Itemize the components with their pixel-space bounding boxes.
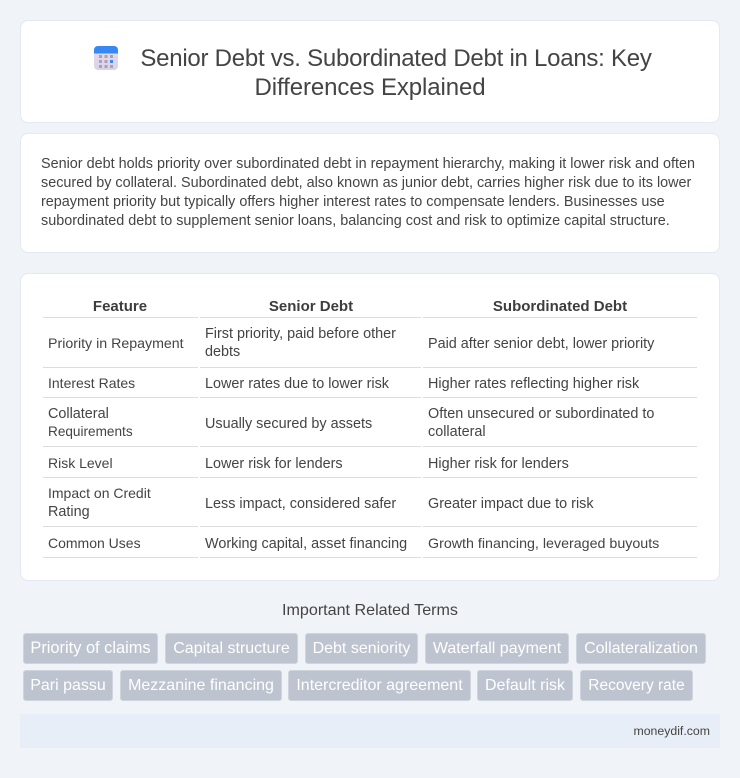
table row: risk level: Lower risk for lenders	[205, 456, 343, 472]
panel: introduction	[20, 133, 720, 253]
table row: interest rates	[48, 375, 640, 392]
footer bar	[20, 714, 720, 748]
footer text: moneydif.com	[633, 724, 710, 738]
icon: calendar	[94, 46, 118, 70]
tag	[576, 633, 706, 664]
panel: comparison table	[20, 273, 720, 581]
table row: common uses	[48, 535, 659, 552]
table row: impact on credit rating: Less impact, considered safer	[205, 496, 396, 512]
table row: common uses: Common Uses	[48, 535, 141, 551]
table row: priority in repayment: First priority, paid before other	[205, 326, 396, 342]
tag: Waterfall payment	[433, 640, 561, 657]
tag	[580, 670, 693, 701]
table header: Senior Debt	[269, 298, 353, 315]
tag: Intercreditor agreement	[296, 677, 463, 694]
tag: Capital structure	[173, 640, 290, 657]
table row: impact on credit rating: Rating	[48, 504, 90, 520]
table row: collateral requirements: Collateral	[48, 406, 109, 422]
text block: introduction: subordinated debt to supplement senior loans, balancing cost and risk to optimize capital structure.	[41, 213, 670, 229]
tag	[425, 633, 569, 664]
table row: risk level: Higher risk for lenders	[428, 456, 569, 472]
text block: introduction: Senior debt holds priority over subordinated debt in repayment hierarchy, making it lower risk and often	[41, 156, 695, 172]
tag	[477, 670, 573, 701]
tag: Default risk	[485, 677, 565, 694]
table header: Feature	[93, 298, 147, 315]
tag: Priority of claims	[30, 639, 151, 657]
table row: common uses: Working capital, asset financing	[205, 536, 407, 552]
table row: collateral requirements: Requirements	[48, 424, 133, 439]
title: Differences Explained	[255, 74, 485, 101]
heading: important related terms: Important Related Terms	[282, 601, 458, 619]
tag	[23, 670, 113, 701]
table row: impact on credit rating	[48, 485, 594, 520]
tag: Recovery rate	[588, 677, 685, 694]
table row: risk level	[48, 455, 569, 472]
title: Senior Debt vs. Subordinated Debt in Loans: Key	[140, 45, 652, 72]
tag	[305, 633, 418, 664]
table row: interest rates: Lower rates due to lower risk	[205, 376, 389, 392]
table row: risk level: Risk Level	[48, 455, 113, 471]
tag list	[23, 633, 706, 701]
table row: interest rates: Higher rates reflecting higher risk	[428, 376, 639, 392]
tag	[23, 633, 158, 664]
table row: collateral requirements: Often unsecured or subordinated to	[428, 406, 654, 422]
table header: Subordinated Debt	[493, 298, 627, 315]
table row: priority in repayment: Priority in Repayment	[48, 336, 184, 352]
tag: Pari passu	[30, 677, 106, 694]
text block: introduction	[41, 156, 695, 229]
table row: collateral requirements: Usually secured by assets	[205, 416, 372, 432]
tag	[165, 633, 298, 664]
text block: introduction: secured by collateral. Subordinated debt, also known as junior debt, carries higher risk due to its lower	[41, 175, 691, 191]
table row: collateral requirements	[48, 406, 654, 440]
tag	[120, 670, 282, 701]
table row: interest rates: Interest Rates	[48, 375, 135, 391]
panel: header	[20, 20, 720, 123]
table row: priority in repayment: Paid after senior debt, lower priority	[428, 336, 654, 352]
table row: priority in repayment	[48, 326, 654, 360]
table row: impact on credit rating: Greater impact due to risk	[428, 496, 594, 512]
table row: common uses: Growth financing, leveraged buyouts	[428, 536, 659, 552]
table row: collateral requirements: collateral	[428, 424, 486, 440]
tag: Collateralization	[584, 640, 698, 657]
title	[140, 45, 652, 101]
table header	[93, 298, 627, 315]
table row: impact on credit rating: Impact on Credit	[48, 485, 151, 501]
tag	[288, 670, 471, 701]
table row: priority in repayment: debts	[205, 344, 240, 360]
tag: Debt seniority	[313, 640, 410, 657]
text block: introduction: repayment priority but typically offers higher interest rates to compensate lenders. Businesses use	[41, 194, 665, 210]
tag: Mezzanine financing	[128, 677, 274, 694]
